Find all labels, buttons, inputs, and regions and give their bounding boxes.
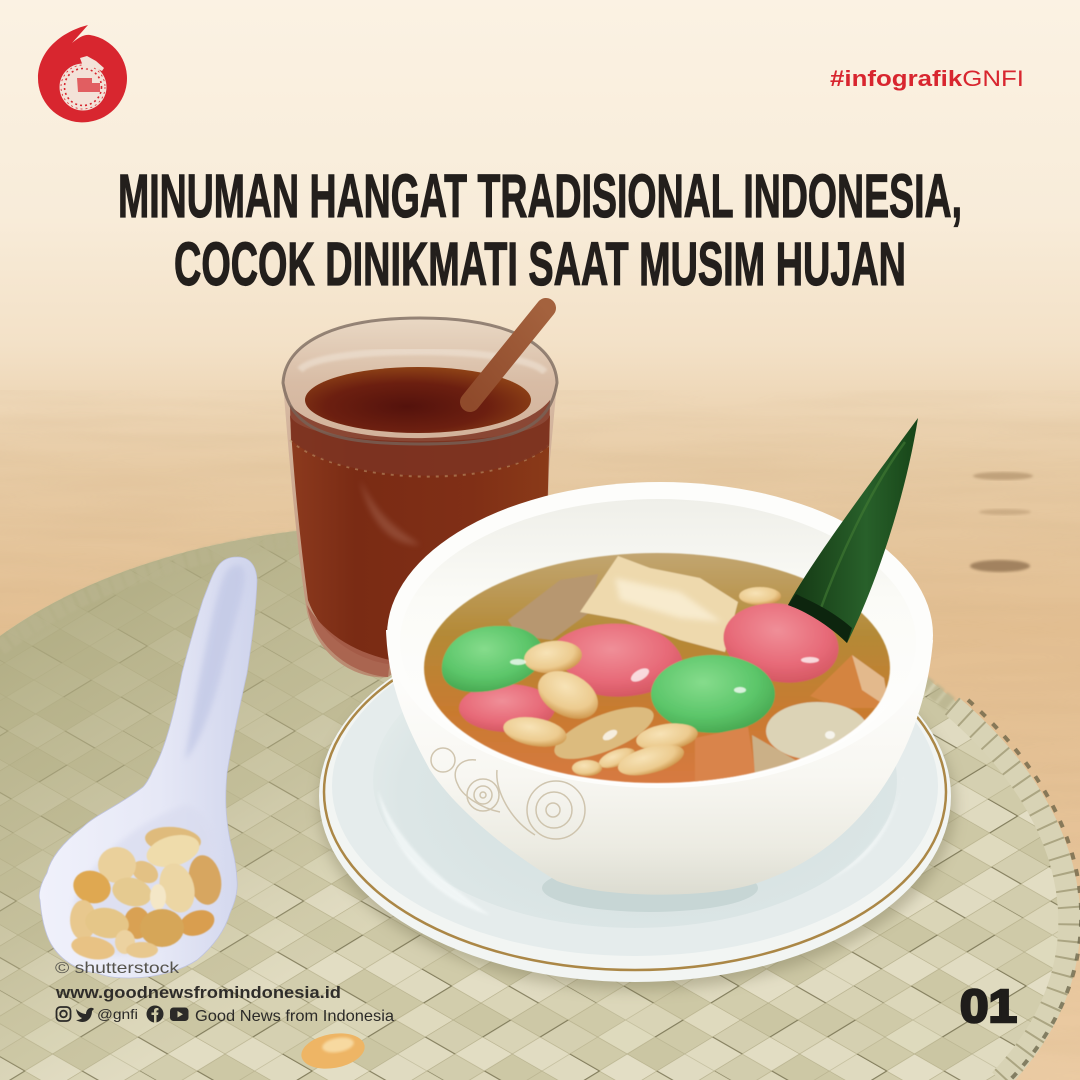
white bowl (386, 482, 933, 912)
icon: instagram (56, 1007, 70, 1021)
loose peanut on mat (299, 1029, 367, 1073)
social media line (56, 1006, 394, 1025)
gloss highlights (510, 657, 835, 742)
page number: 01 (960, 980, 1017, 1032)
glass of wedang tea with cinnamon stick (283, 308, 557, 677)
soup with dumplings (424, 553, 890, 783)
icon: facebook (146, 1006, 164, 1023)
logo: GNFI red six with emblem (38, 25, 127, 122)
pandan leaf (788, 418, 918, 643)
white spoon (39, 557, 257, 978)
peanuts on spoon (69, 825, 225, 963)
page name: Good News from Indonesia (195, 1008, 394, 1025)
long fruit slice (554, 706, 654, 760)
title (118, 162, 962, 298)
website url: www.goodnewsfromindonesia.id (55, 983, 341, 1002)
icon: youtube (170, 1008, 188, 1021)
gray bread (508, 574, 598, 640)
pink dumpling right (723, 602, 839, 684)
hashtag: #infografik GNFI (830, 66, 1024, 91)
woven placemat (0, 524, 1080, 1080)
white dumpling (766, 702, 868, 760)
green dumpling left (442, 626, 543, 692)
white bread (580, 556, 738, 652)
handle: @gnfi (97, 1006, 138, 1022)
small nut top (739, 587, 781, 605)
plate with gold rim (319, 610, 955, 990)
orange chunk right (810, 656, 879, 708)
credit: shutterstock: © shutterstock (55, 960, 180, 977)
bottom chunks (695, 727, 756, 782)
green dumpling center (651, 655, 775, 733)
peanuts in soup (523, 640, 582, 674)
pink dumpling center (553, 624, 683, 697)
bowl swirl decoration (431, 748, 585, 839)
icon: twitter (76, 1008, 94, 1022)
cinnamon stick (470, 308, 546, 402)
pink dumpling left (459, 684, 555, 732)
